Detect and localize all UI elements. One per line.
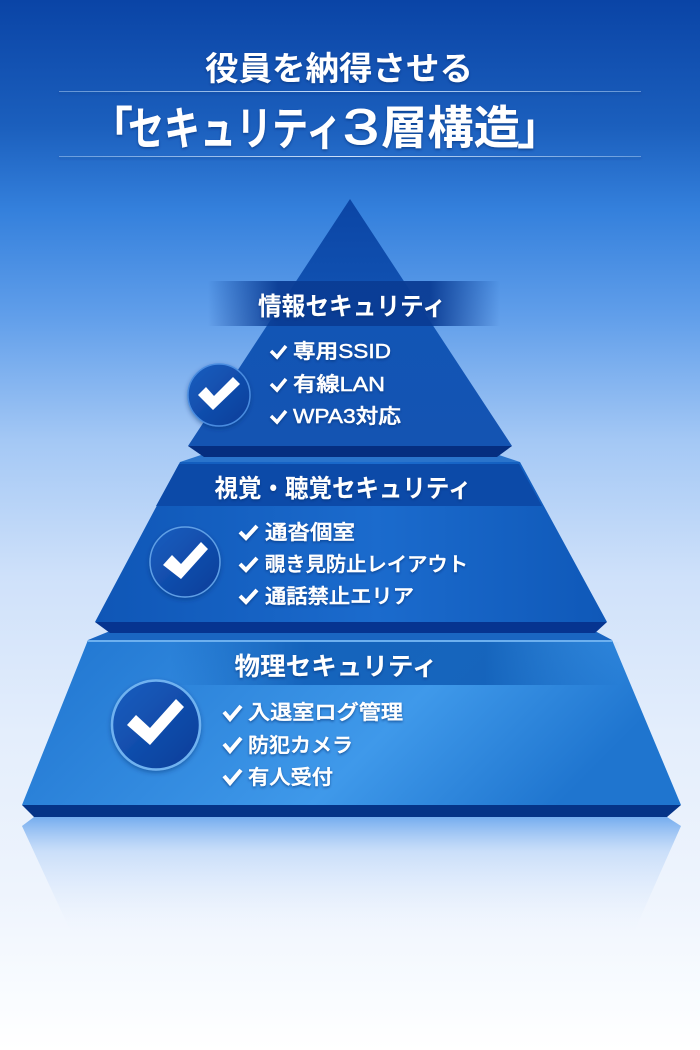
tier 1 list: WPA3対応 — [293, 405, 401, 428]
tier 2 front face — [95, 462, 607, 622]
tier 1 list: 専用SSID — [293, 340, 391, 363]
tier 2 badge — [150, 527, 220, 597]
tier 1 front face — [188, 199, 512, 446]
tier 1: information security — [188, 199, 512, 457]
tier 3: physical security — [22, 631, 681, 817]
tier 1 list: 有線LAN — [293, 373, 385, 396]
title line 2: 3 — [343, 99, 379, 155]
tier 3 side band — [22, 805, 681, 817]
title line 2: 「 — [88, 103, 133, 154]
tier 2 list: 通話禁止エリア — [265, 585, 414, 608]
tier 2 list — [240, 521, 468, 608]
title — [59, 50, 641, 157]
tier 3 heading band — [170, 642, 620, 685]
tier 3 heading: 物理セキュリティ — [234, 653, 438, 681]
tier 1 badge — [188, 364, 250, 426]
title line 2: 層構造 — [381, 102, 520, 154]
tier 3 front face — [22, 640, 681, 805]
title line 1: 役員を納得させる — [205, 50, 473, 87]
tier 2 heading: 視覚・聴覚セキュリティ — [214, 475, 472, 503]
tier 2: visual and auditory security — [95, 455, 607, 633]
tier 3 list: 防犯カメラ — [248, 734, 353, 757]
tier 2 list: 通沓個室 — [265, 521, 355, 544]
tier 1 heading band — [208, 281, 500, 326]
title line 2 — [88, 99, 562, 155]
tier 3 list — [224, 701, 403, 789]
tier 1 heading: 情報セキュリティ — [258, 293, 446, 321]
tier 3 list: 有人受付 — [248, 766, 333, 789]
title line 2: 」 — [517, 103, 562, 154]
tier 2 list: 覗き見防止レイアウト — [265, 553, 468, 576]
tier 2 heading band — [156, 464, 542, 506]
tier 2 side band — [95, 622, 607, 633]
title line 2: セキュリティ — [128, 103, 342, 155]
tier 1 side band — [188, 446, 512, 457]
tier 1 list — [271, 340, 401, 428]
tier 3 badge — [112, 680, 200, 770]
tier 3 list: 入退室ログ管理 — [248, 701, 403, 724]
reflection — [22, 817, 681, 932]
